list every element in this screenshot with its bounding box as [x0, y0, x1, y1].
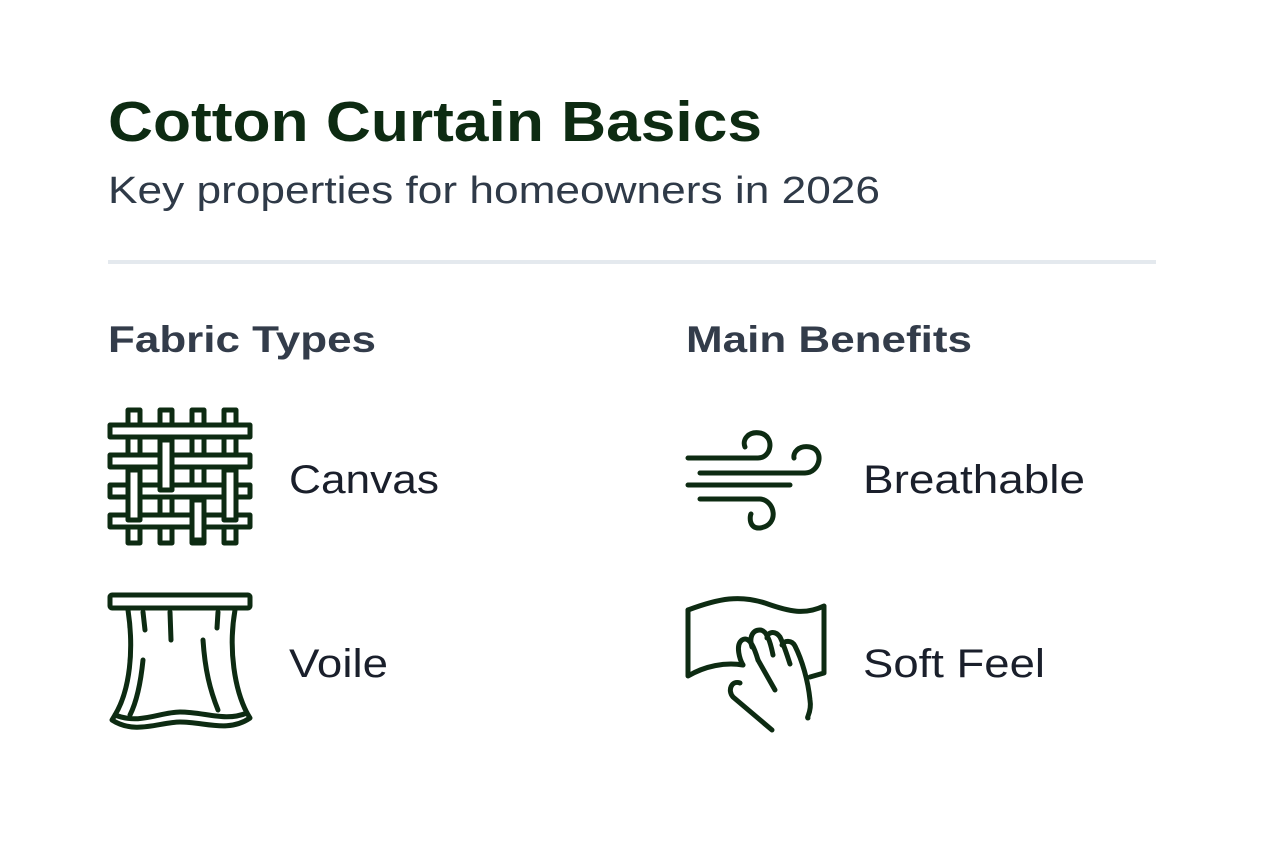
heading: main benefits: Main Benefits — [686, 319, 972, 360]
title: Cotton Curtain Basics — [108, 90, 762, 154]
subtitle: Key properties for homeowners in 2026 — [108, 170, 880, 212]
heading: fabric types: Fabric Types — [108, 319, 376, 360]
icon: soft feel hand on fabric — [688, 599, 824, 730]
label: breathable: Breathable — [863, 458, 1085, 502]
icon: voile curtain — [110, 595, 250, 727]
icon: canvas weave — [110, 410, 250, 543]
label: soft feel: Soft Feel — [863, 642, 1045, 686]
label: canvas: Canvas — [289, 458, 439, 502]
label: voile: Voile — [289, 642, 388, 686]
icon: wind — [688, 433, 819, 528]
